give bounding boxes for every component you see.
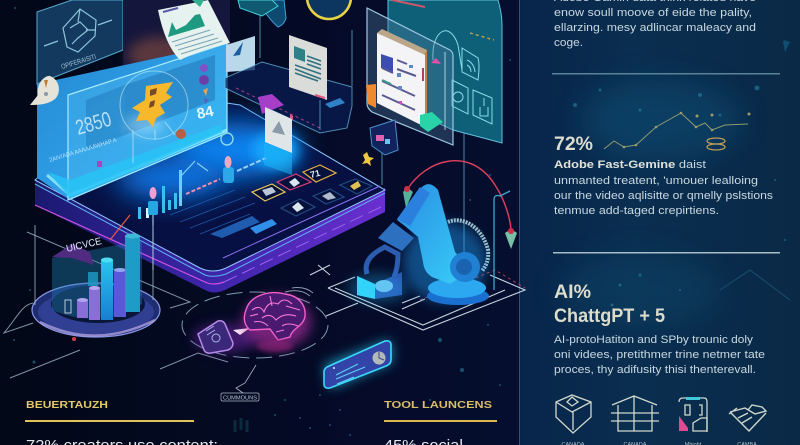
heading rule xyxy=(25,420,194,422)
description xyxy=(554,334,765,376)
heading: AI% xyxy=(554,282,591,303)
orange marker xyxy=(176,129,186,139)
line sparkline xyxy=(604,112,750,150)
divider xyxy=(553,252,780,254)
description: Adobe Fast-Gemine daist xyxy=(554,159,706,171)
bottom icon row xyxy=(556,395,766,445)
icon: cyan shield xyxy=(262,0,286,27)
top text block: enow soull moove of eide the pality, xyxy=(554,7,752,19)
tile glyphs xyxy=(262,168,361,212)
floor plate xyxy=(310,265,525,330)
orange tab xyxy=(366,84,376,108)
description: our the video aqlisitte or qmelly pslstions xyxy=(554,190,774,202)
icon: yellow ring xyxy=(307,0,351,19)
caption box: CUMMOUNS xyxy=(223,396,257,402)
glass dashboard panel xyxy=(37,43,233,200)
green cube xyxy=(420,112,443,132)
decorative icon ghost xyxy=(235,418,247,432)
glass panel caption: 2AIV/ADA AAAAAAWHAP A xyxy=(49,138,118,164)
description: AI-protoHatiton and SPby trounic doly xyxy=(554,334,754,346)
chart widget xyxy=(238,0,278,16)
bottom middle heading xyxy=(384,399,497,445)
chip xyxy=(325,98,345,108)
robot arm xyxy=(310,161,525,330)
dashed ring xyxy=(182,292,328,358)
icon: handshake xyxy=(729,405,766,431)
floor circuit lines xyxy=(4,232,228,378)
back screen xyxy=(37,0,230,84)
document with chart xyxy=(158,0,255,72)
white document xyxy=(377,29,427,127)
target circle xyxy=(120,71,188,163)
rear cyan panel xyxy=(388,0,502,143)
mini bar chart xyxy=(138,170,182,219)
small cards xyxy=(210,216,260,238)
holographic bar chart xyxy=(32,215,160,341)
divider xyxy=(552,73,780,74)
small stamped card xyxy=(258,94,293,175)
small document card xyxy=(289,35,327,100)
bottom left heading: BEUERTAUZH xyxy=(26,399,108,411)
data strips xyxy=(186,179,220,194)
icon: alert speech bubble xyxy=(30,76,59,105)
top text block: ellarzing. mesy adlincar maleacy and xyxy=(554,22,756,34)
icon: building xyxy=(611,396,659,431)
connectivity icons xyxy=(433,31,492,124)
description xyxy=(554,159,774,217)
stat: 72% xyxy=(554,112,774,217)
top text block xyxy=(554,0,756,49)
caption: OPIFERAISITI xyxy=(61,54,97,71)
bottom left heading xyxy=(25,399,218,445)
glass document panel xyxy=(366,8,453,145)
icon: app phone xyxy=(679,397,707,432)
pink triangle xyxy=(431,58,441,64)
icon: gold star xyxy=(362,152,374,166)
subheading: ChattgPT + 5 xyxy=(554,306,665,327)
value: 72% xyxy=(554,133,593,155)
caption box xyxy=(221,365,259,402)
ring node xyxy=(221,133,233,145)
base xyxy=(427,287,489,305)
bottom middle heading: TOOL LAUNCENS xyxy=(384,399,492,411)
icon: network emblem xyxy=(44,9,112,52)
top text block: coge. xyxy=(554,37,583,49)
blue message widget xyxy=(324,340,392,388)
stat: AI% xyxy=(554,282,765,376)
chart figures: 2850 xyxy=(73,108,114,140)
red arc arrow xyxy=(407,161,511,232)
chart bars xyxy=(65,234,140,320)
tile glyphs: 71 xyxy=(309,168,321,180)
arm xyxy=(397,184,472,284)
lock box xyxy=(348,272,408,303)
description: proces, thy adifusity thisi thenterevall. xyxy=(554,364,756,376)
side icons xyxy=(199,64,209,104)
upper shelf xyxy=(225,0,464,290)
spark xyxy=(233,328,250,335)
neural device xyxy=(182,288,328,402)
gripper xyxy=(366,222,414,277)
gear arc xyxy=(448,220,488,271)
icon: shield xyxy=(556,395,591,433)
icon: yellow lightning emblem xyxy=(132,82,173,127)
top icons xyxy=(238,0,351,27)
platform dashboard xyxy=(138,156,372,270)
word label: UICVCE xyxy=(65,236,103,255)
icon: brain xyxy=(243,288,313,348)
icon captions xyxy=(562,442,757,445)
heading rule xyxy=(384,420,497,422)
metric 84: 84 xyxy=(195,103,216,123)
hanging badge xyxy=(370,120,398,155)
feature tiles xyxy=(252,165,372,216)
node pins xyxy=(148,156,234,270)
description: unmanted treatent, 'umouer lealloing xyxy=(554,175,758,187)
description: tenmue add-taged crepirtiens. xyxy=(554,205,719,217)
description: oni videes, pretithmer trine netmer tate xyxy=(554,349,765,361)
platform xyxy=(35,90,385,292)
icon: wearable device xyxy=(198,321,233,353)
